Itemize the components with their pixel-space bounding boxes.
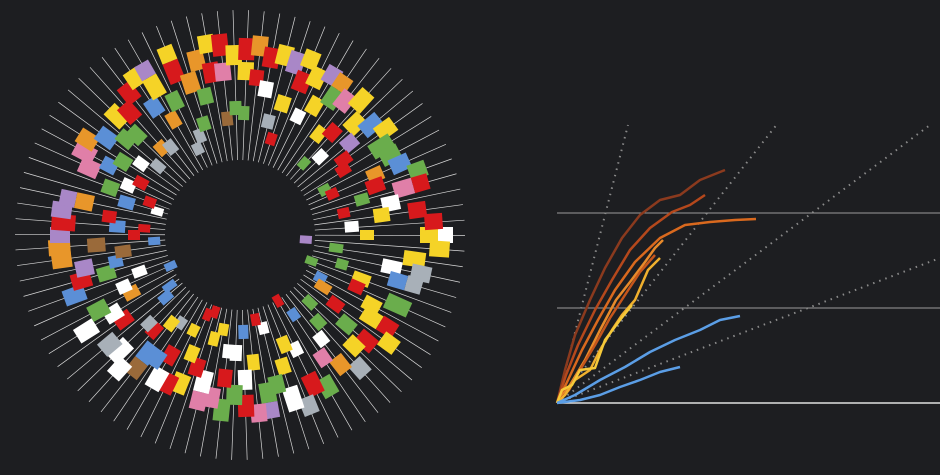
line chart [557,123,940,403]
blue series [557,316,740,403]
dotted reference lines [557,123,940,403]
gridlines [557,212,940,214]
colored blocks [48,33,453,423]
radial chart [48,33,453,423]
orange series [557,170,756,403]
spokes [90,85,390,385]
